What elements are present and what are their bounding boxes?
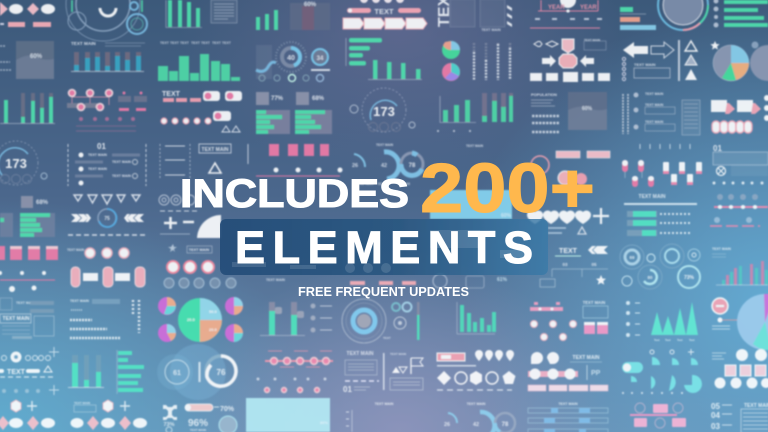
subheading: updates: FREE FREQUENT UPDATES: [298, 284, 469, 299]
pie charts cluster: 50.0: [209, 309, 218, 314]
text main faint row under title: TEXT MAIN: [266, 278, 285, 282]
twin mint bars: [260, 302, 332, 336]
text main list panel: TEXT MAIN: [645, 120, 664, 124]
text main stacked bars: [71, 41, 145, 72]
three arc dials: [352, 143, 484, 186]
pie charts cluster: 20.0: [209, 327, 218, 332]
text main stacked bars: TEXT MAIN: [71, 41, 96, 46]
pink ring dials: [164, 244, 236, 288]
mint histogram: TEXT: [180, 41, 190, 45]
heading: elements: ELEMENTS: [235, 222, 533, 273]
text main list panel: TEXT MAIN: [645, 92, 664, 96]
percent block: 70%: [220, 406, 235, 413]
ring dials right: 69: [629, 255, 635, 260]
pink timeline bottom: [630, 403, 686, 428]
light blue block behind 200: [430, 190, 512, 219]
heading: 200+: 200+: [420, 149, 595, 227]
percent block: [163, 404, 237, 432]
light blue block behind 200: 60%: [501, 213, 512, 219]
hearts and pink items: [527, 151, 610, 234]
dotted columns: [474, 43, 510, 80]
heading: includes: INCLUDES: [180, 172, 409, 216]
mint histogram: TEXT: [191, 41, 201, 45]
text main box with triangle: TEXT MAIN: [202, 147, 229, 153]
text tag group: TEXT: [162, 91, 181, 98]
mint histogram: TEXT: [201, 41, 211, 45]
table rows bottom: [528, 402, 608, 432]
numbered list bottom right: 03: [711, 422, 720, 431]
mint histogram: TEXT: [170, 41, 180, 45]
text main list panel: TEXT MAIN: [645, 103, 664, 107]
timeline and pink cards lower: [530, 300, 608, 340]
three arc dials: 01 TEXT: [360, 182, 375, 186]
three arc dials: TEXT MAIN: [466, 144, 484, 148]
small mint bars and photo: [256, 2, 330, 30]
pin with text row: TEXT: [7, 369, 26, 376]
triangles and flag: TEXT MAIN: [390, 352, 406, 356]
bottom diamonds center: TEXT MAIN: [74, 401, 90, 405]
small mint bars and photo: 60%: [304, 2, 317, 8]
diamonds top left: [0, 2, 55, 27]
bottom axis chart and dials: [346, 402, 515, 432]
three arc dials: 02: [378, 182, 382, 186]
lower left text panels: TEXT MAIN: [16, 301, 35, 305]
population panel: [531, 92, 607, 132]
pink card rows: [0, 246, 58, 292]
rings 61 and 76: 61: [173, 370, 181, 377]
gauge with rings and wave: 34: [317, 56, 324, 62]
bottom axis chart and dials: 26: [444, 422, 450, 428]
bottom axis chart and dials: TEXT MAIN: [467, 402, 486, 406]
year timeline: YEAR: [580, 5, 597, 11]
timeline and pink cards lower: TEXT MAIN: [583, 300, 605, 305]
dotted rows: TEXT MAIN: [70, 299, 89, 303]
percent squares with bars: 68%: [312, 96, 325, 102]
year timeline: [530, 0, 602, 28]
mint bar chart top: [166, 0, 202, 28]
gauge with rings and wave: 40: [287, 55, 295, 62]
pie charts cluster: [158, 297, 243, 342]
text main box with triangle: [160, 144, 248, 179]
vertical text and panels: TEXT MAIN: [481, 28, 501, 32]
dotted rows: [70, 299, 139, 338]
triangles and chevrons with dial: 75: [104, 216, 110, 222]
squares and bars left: 68%: [36, 200, 49, 206]
mint triangles chart: Text: [677, 338, 683, 342]
drops and pills: [528, 352, 608, 391]
drops and pills: TEXT MAIN: [573, 355, 600, 361]
percent squares with bars: 77%: [271, 96, 284, 102]
numbered list 01: TEXT MAIN: [112, 160, 131, 164]
big arrows panel: TEXT MAIN: [634, 62, 656, 67]
pie charts cluster: 20.0: [187, 317, 196, 322]
text main mint rows: TEXT MAIN: [639, 194, 666, 200]
table rows bottom: TEXT MAIN: [558, 402, 578, 406]
mint triangles chart: Text: [665, 338, 671, 342]
text chevrons panel: 05: [591, 262, 597, 267]
pink pills and white circles: TEXT MAIN: [67, 248, 85, 252]
triangles and chevrons with dial: [68, 195, 147, 235]
mint horizontal and vertical bars: [346, 38, 422, 80]
three tall mint bars: [68, 355, 104, 388]
bottom diamonds center: [70, 400, 147, 430]
rings 61 and 76: [157, 344, 236, 400]
text chevrons panel: 03: [562, 262, 568, 267]
percent block: TEXT MAIN: [190, 428, 206, 432]
text with arrow tags: [343, 0, 427, 29]
rings 61 and 76: 76: [217, 368, 226, 377]
left photo panel: 60%: [30, 54, 43, 60]
three arc dials: TEXT MAIN: [376, 143, 394, 147]
numbered list bottom right: 05: [711, 402, 720, 411]
text main mint rows: [624, 194, 697, 236]
flow arrows and tags: TEXT MAIN: [584, 38, 600, 42]
ring dials right: 73%: [684, 275, 695, 281]
large light rectangle bottom: [246, 398, 330, 432]
text main 01 panel: TEXT MAIN: [347, 351, 374, 357]
text main 01 panel: 01: [343, 385, 352, 394]
population panel: 60%: [582, 106, 593, 112]
grouped mint columns: [437, 96, 476, 132]
mint triangles chart: [626, 301, 698, 342]
title block: [180, 149, 595, 299]
numbered list 01: 01: [97, 142, 106, 151]
panel 01 right: [710, 144, 768, 226]
HUD with blue ring: [342, 299, 420, 343]
capsule and partial pies: [622, 349, 702, 394]
three arc dials: 03: [406, 182, 410, 186]
three arc dials: 26: [352, 163, 358, 169]
big arrows panel: [622, 40, 697, 81]
labelled tags: [620, 7, 656, 30]
text main list panel: [623, 92, 700, 135]
white tags with pink arrows: [711, 95, 768, 133]
three arc dials: 78: [409, 163, 416, 169]
numbered list 01: TEXT MAIN: [88, 153, 107, 157]
pin with text row: [0, 347, 59, 395]
text chevrons panel: TEXT: [559, 248, 578, 255]
percent block: 73%: [163, 422, 175, 428]
left small bars: [0, 93, 55, 124]
pink node flow: [256, 351, 333, 392]
text main 01 panel: [343, 351, 384, 394]
ring dials right: [620, 244, 700, 289]
lower left text panels: TEXT MAIN: [3, 316, 30, 322]
ring dials right: 80: [647, 275, 653, 280]
text with arrow tags: TEXT: [374, 7, 394, 16]
lower left text panels: [0, 298, 54, 339]
pink cards upper center: [256, 144, 342, 176]
mint bar chart lower: [457, 302, 496, 334]
year timeline: YEAR: [548, 5, 565, 11]
bottom axis chart and dials: TEXT MAIN: [375, 402, 394, 406]
text panel: [211, 0, 237, 23]
left photo panel: [0, 41, 54, 79]
stop circle and pie: [712, 294, 768, 350]
numbered list bottom right: [711, 402, 768, 432]
numbered list 01: [68, 142, 146, 186]
mint triangles chart: Text: [689, 338, 695, 342]
text main faint row under title: 61%: [497, 277, 508, 283]
text main faint row under title: [266, 274, 508, 288]
numbered list bottom right: 04: [711, 411, 720, 420]
bottom axis chart and dials: 78: [502, 422, 509, 428]
text chevrons panel: [540, 246, 608, 287]
pink capsules: [622, 144, 702, 187]
population panel: POPULATION: [531, 92, 557, 97]
triangles and flag: [390, 352, 423, 390]
circle and square tree: [712, 349, 768, 388]
numbered list 01: TEXT MAIN: [88, 167, 107, 171]
speed gauge 173 left: 173: [5, 156, 27, 171]
shapes row: [437, 350, 516, 390]
speed gauge 173 top: [350, 88, 415, 132]
bottom axis chart and dials: 42: [473, 422, 479, 428]
alternating column chart: TEXT MAIN: [712, 247, 731, 251]
percent block: 96%: [188, 418, 208, 429]
pink ring dials: TEXT MAIN: [189, 248, 209, 252]
gauge with rings and wave: [256, 42, 330, 82]
speed gauge 173 left: [0, 141, 47, 185]
drops and pills: PP: [591, 370, 601, 377]
numbered list 01: TEXT MAIN: [112, 174, 131, 178]
percent squares with bars: [256, 92, 332, 134]
squares and bars left: [0, 196, 55, 237]
text tag group: [161, 91, 242, 132]
speed gauge 173 top: 173: [373, 104, 395, 119]
mint triangles chart: Text: [654, 338, 660, 342]
stacked bars right of gauge: [482, 93, 513, 122]
mint histogram: TEXT: [212, 41, 222, 45]
star and pies: [710, 41, 768, 81]
mint histogram: TEXT: [222, 41, 232, 45]
pink flow chart: [67, 90, 147, 131]
vertical text and panels: [436, 0, 512, 32]
concentric circles with plus and quarter pie: [159, 195, 221, 238]
gauge: [658, 0, 708, 30]
bottom diamonds left: [0, 400, 55, 430]
mint histogram: TEXT: [160, 41, 170, 45]
faint elements seen through banner: [232, 230, 530, 273]
alternating column chart: [712, 247, 768, 285]
mint histogram: [158, 41, 240, 81]
horizontal mint bars: [117, 350, 144, 394]
flow arrows and tags: [530, 38, 610, 82]
dark banner: [220, 219, 548, 275]
mint list: [714, 0, 768, 28]
HUD with blue ring: TEXT: [383, 336, 391, 340]
HUD circles: [66, 0, 147, 41]
three arc dials: 42: [381, 163, 387, 169]
pink pills and white circles: [67, 248, 145, 287]
two pie charts: [442, 41, 460, 81]
panel 01 right: 01: [713, 144, 722, 153]
large light rectangle bottom: 80%: [320, 420, 328, 425]
